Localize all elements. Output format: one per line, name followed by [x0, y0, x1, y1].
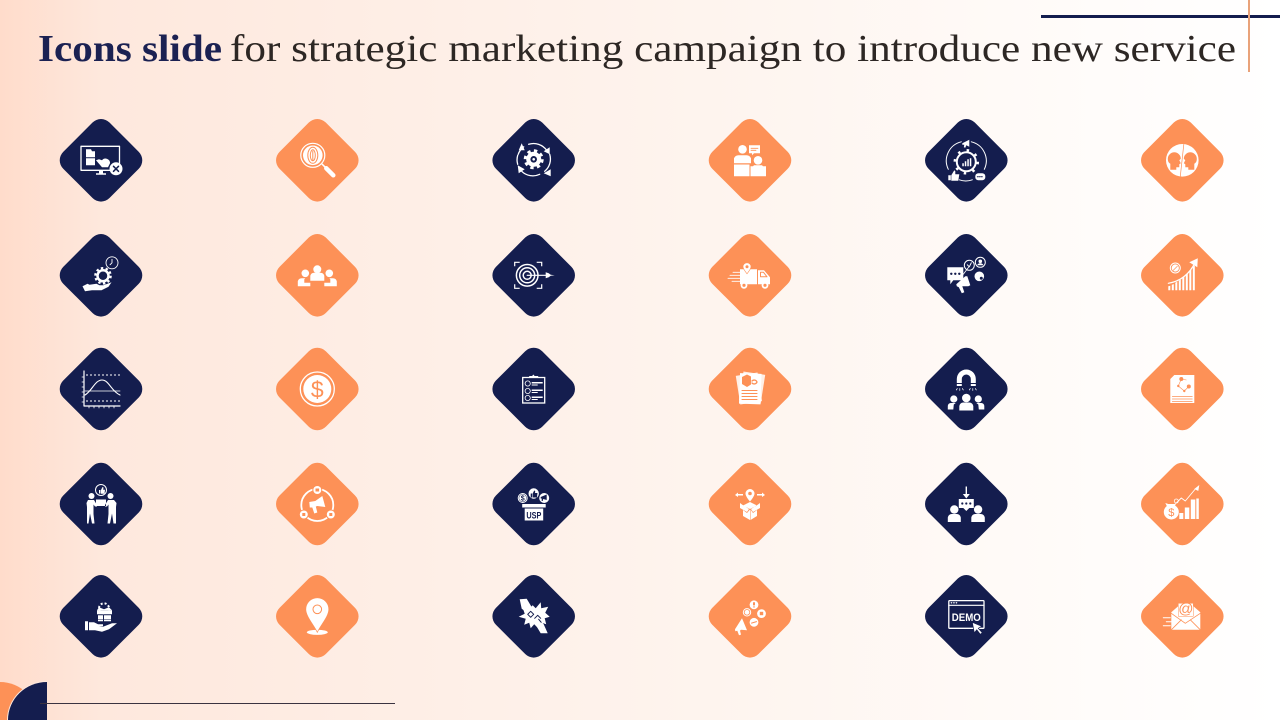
- tile: email envelope: [1136, 570, 1229, 663]
- icon: handover: [86, 484, 116, 524]
- icon: magnet: [948, 370, 984, 410]
- tile: fingerprint magnifier: [271, 114, 364, 207]
- tile: delivery truck: [704, 229, 796, 322]
- tile: bell curve graph: [55, 343, 147, 435]
- icon: hand gear: [82, 257, 118, 291]
- tile: checklist clipboard: [487, 343, 580, 435]
- icon: pin: [306, 598, 329, 635]
- icon: growth chart: [1168, 258, 1198, 290]
- tile: target and dart: [487, 229, 580, 322]
- icon: USP: $: [521, 496, 525, 502]
- icon: gear cycle: [517, 143, 551, 176]
- icon: revenue chart: $: [1168, 507, 1174, 519]
- tile: gear with rotating arrows: [487, 114, 580, 207]
- tile: gear chart with social loop: [920, 114, 1013, 207]
- tile: documents with map: [704, 343, 796, 435]
- tile: arrow into chat between people: [920, 458, 1013, 550]
- tile: people at desk: [704, 114, 796, 207]
- top navy rule: [1041, 15, 1280, 18]
- icon: coin: $: [311, 376, 324, 402]
- tile: dollar coin: [271, 343, 364, 435]
- tile: location pin: [271, 570, 364, 663]
- icon: email: @: [1178, 600, 1193, 617]
- icon: papers: [736, 371, 765, 405]
- icon: consultation: [734, 145, 766, 176]
- tile: USP box: [487, 458, 580, 550]
- icon: social promotion: [947, 257, 985, 293]
- title: Icons slide: [38, 28, 222, 70]
- tile: hand holding gear and clock: [55, 229, 147, 322]
- tile: chat, megaphone and social icons: [920, 229, 1013, 322]
- icon: USP: USP: [526, 511, 542, 522]
- icon: USP: [518, 488, 549, 522]
- icon: promotion cycle: [299, 485, 336, 521]
- icon: curve chart: [82, 371, 120, 408]
- icon: product hand: [85, 603, 117, 632]
- icon: demo window: DEMO: [952, 612, 981, 624]
- icon: team: [298, 265, 337, 286]
- tile: two heads facing: [1136, 114, 1229, 207]
- icon: heads: [1166, 144, 1199, 177]
- tile: two people exchanging box: [55, 458, 147, 550]
- corner decoration: circles: [0, 681, 47, 720]
- bottom rule: [40, 703, 395, 704]
- icon: clipboard: [523, 374, 545, 403]
- tile: monitor with folders: [55, 114, 147, 207]
- icon: report: [1170, 375, 1194, 403]
- tile: report with map points: [1136, 343, 1229, 435]
- tile: money growth chart: [1136, 458, 1229, 550]
- tile: demo browser window: [920, 570, 1013, 663]
- icon grid: [55, 114, 1229, 663]
- icon: monitor: [81, 146, 122, 175]
- icon: clash: [519, 599, 550, 633]
- tile: megaphone in cycle: [271, 458, 364, 550]
- icon: target: [515, 262, 555, 288]
- tile: hand holding box with gear: [55, 570, 147, 663]
- icon: box location: [735, 489, 765, 520]
- icon: magnifier: [301, 143, 333, 175]
- title: for strategic marketing campaign to introduce new service: [230, 28, 1236, 70]
- tile: open box with pin: [704, 458, 796, 550]
- icon: truck: [728, 263, 770, 289]
- icon: feedback: [948, 486, 985, 522]
- tile: clashing fists with burst: [487, 570, 580, 663]
- top orange vertical rule: [1248, 0, 1250, 72]
- icon: marketing loop: [946, 140, 986, 181]
- tile: megaphone with circles: [704, 570, 796, 663]
- icon: advertising: [735, 600, 766, 635]
- tile: magnet attracting people: [920, 343, 1013, 435]
- tile: rising bar chart with arrow: [1136, 229, 1229, 322]
- tile: three people group: [271, 229, 364, 322]
